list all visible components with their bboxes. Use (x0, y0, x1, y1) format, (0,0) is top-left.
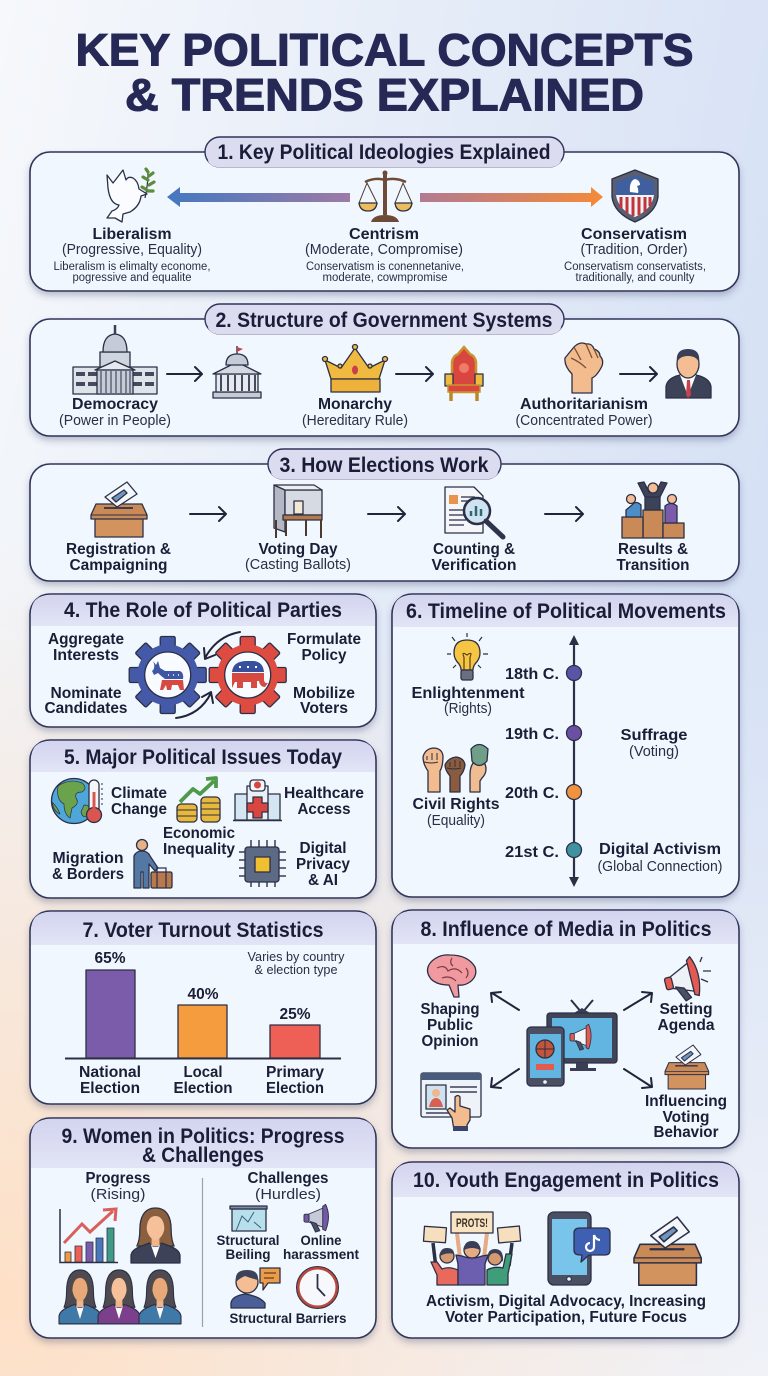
label: challenges: (Hurdles) (255, 1186, 321, 1203)
timeline century labels: 20th C. (505, 785, 559, 802)
label: enlightenment: Enlightenment (412, 685, 525, 702)
label: enlightenment: (Rights) (444, 701, 492, 717)
timeline century labels: 18th C. (505, 666, 559, 683)
label: climate: Climate (111, 785, 167, 802)
bar chart: Election (80, 1080, 140, 1097)
label: authoritarianism: Authoritarianism (520, 396, 648, 413)
arrow: cycle bottom (176, 692, 213, 718)
icon: globe and thermometer (52, 778, 103, 824)
label: structural beiling: Structural (216, 1232, 280, 1248)
label: enlightenment (412, 685, 525, 717)
heading: 6 timeline (393, 595, 738, 627)
label: shaping opinion: Shaping (420, 1001, 480, 1018)
labels: party functions left (44, 631, 128, 717)
icon: counting documents (445, 487, 503, 537)
panel: 7 voter turnout (30, 911, 376, 1104)
label: structural beiling (216, 1232, 280, 1262)
label: centrism (305, 226, 464, 284)
label: conservatism: Conservatism (581, 226, 687, 243)
icon: clock (296, 1266, 338, 1308)
label: registration (66, 541, 171, 574)
label: setting agenda (658, 1001, 715, 1034)
title: KEY POLITICAL CONCEPTS (76, 24, 694, 76)
heading: 9 women: & Challenges (142, 1143, 264, 1167)
label: democracy (59, 396, 171, 429)
icon: megaphone (660, 956, 711, 1005)
icon: man with speech bubble (231, 1268, 280, 1308)
label: digital activism: (Global Connection) (598, 859, 722, 875)
bar chart (65, 950, 341, 1097)
note: varies by country: & election type (254, 963, 338, 977)
label: challenges: Challenges (248, 1170, 329, 1187)
label: suffrage: (Voting) (629, 744, 679, 760)
bar chart: Local (184, 1064, 222, 1081)
heading: 9 women: 9. Women in Politics: Progress (62, 1124, 345, 1148)
label: suffrage (620, 727, 688, 760)
label: voting day (245, 541, 351, 573)
panel: 3 elections (30, 449, 739, 581)
labels: party functions left: Candidates (44, 700, 128, 717)
labels: party functions right (287, 631, 361, 717)
labels: party functions right: Formulate (287, 631, 361, 648)
label: results: Transition (616, 557, 690, 574)
labels: party functions right: Mobilize (293, 685, 355, 702)
label: shaping opinion: Opinion (422, 1033, 478, 1050)
label: shaping opinion (420, 1001, 480, 1050)
arrow: toward conservatism (420, 187, 603, 207)
arrow: to agenda (624, 992, 652, 1010)
icon: fist (565, 343, 603, 393)
label: civil rights: (Equality) (427, 813, 485, 829)
icon: migrant with suitcase (134, 840, 172, 888)
label: voting day: Voting Day (258, 541, 338, 558)
label: digital activism (598, 841, 722, 875)
label: suffrage: Suffrage (620, 727, 688, 744)
heading: 7 turnout: 7. Voter Turnout Statistics (82, 918, 324, 942)
panel: 2 government systems (30, 304, 739, 436)
bar chart: 65% (94, 950, 126, 967)
label: authoritarianism: (Concentrated Power) (516, 413, 652, 429)
icon: raised fists (423, 744, 488, 792)
label: counting: Verification (432, 557, 516, 574)
bar chart: 40% (188, 986, 218, 1003)
icon: red gear with elephant (209, 636, 286, 714)
bar chart: Election (174, 1080, 232, 1097)
label: influencing voting (645, 1093, 727, 1141)
icon: rising chart (60, 1209, 118, 1262)
icon: small ballot box (665, 1045, 709, 1089)
icon: three women (59, 1270, 181, 1324)
label: inequality (163, 825, 235, 858)
label: liberalism: Liberalism (92, 226, 172, 243)
label: influencing voting: Voting (662, 1109, 710, 1126)
title: & TRENDS EXPLAINED (125, 70, 644, 120)
icon: woman leader (131, 1208, 180, 1263)
heading: 8 media (393, 911, 738, 944)
label: democracy: (Power in People) (59, 413, 171, 429)
panel: 9 women in politics (30, 1118, 376, 1338)
icon: browser and hand (421, 1073, 481, 1131)
label: influencing voting: Influencing (645, 1093, 727, 1110)
label: voting day: (Casting Ballots) (245, 557, 351, 573)
label: results (616, 541, 690, 574)
icon: throne (445, 347, 483, 401)
timeline century labels: 19th C. (505, 726, 559, 743)
panel: 8 media influence (392, 910, 739, 1148)
panel: 10 youth engagement (392, 1162, 739, 1338)
label: healthcare: Healthcare (284, 785, 364, 802)
icon: dove (107, 169, 154, 222)
label: healthcare (284, 785, 364, 818)
icon: coins and rising arrow (177, 778, 220, 822)
icon: scales (359, 170, 412, 222)
label: conservatism: traditionally, and counlty (576, 272, 695, 284)
label: civil rights: Civil Rights (412, 796, 500, 813)
heading: 6 timeline: 6. Timeline of Political Movements (406, 599, 726, 623)
labels: party functions left: Aggregate (48, 631, 124, 648)
label: monarchy: (Hereditary Rule) (302, 413, 408, 429)
label: registration: Registration & (66, 541, 171, 558)
label: digital activism: Digital Activism (599, 841, 721, 858)
labels: party functions left: Interests (53, 647, 119, 664)
arrow: to browser (491, 1069, 519, 1088)
icon: glass ceiling window (230, 1206, 267, 1231)
icon: chip (239, 840, 286, 887)
label: digital privacy: Privacy (296, 856, 350, 873)
note: varies by country (248, 950, 345, 977)
label: centrism: (Moderate, Compromise) (305, 242, 463, 258)
icon: capitol (73, 325, 157, 394)
bar chart: Primary (266, 1064, 324, 1081)
label: climate (111, 785, 167, 818)
arrow: step 2 (368, 507, 405, 521)
arrow: monarchy (396, 367, 433, 381)
label: liberalism: (Progressive, Equality) (62, 242, 202, 258)
arrow: to voting (624, 1069, 652, 1088)
label: setting agenda: Agenda (658, 1017, 715, 1034)
bar chart: Election (266, 1080, 324, 1097)
label: centrism: Centrism (349, 226, 419, 243)
icon: crown (322, 344, 388, 392)
icon: voting booth (274, 485, 322, 538)
label: progress (86, 1170, 151, 1203)
timeline century labels: 21st C. (505, 844, 559, 861)
heading pill: 2 government: 2. Structure of Government Systems (216, 308, 553, 332)
arrow: cycle top (204, 632, 240, 659)
labels: party functions right: Voters (300, 700, 348, 717)
label: setting agenda: Setting (660, 1001, 712, 1018)
icon: shield (612, 170, 658, 222)
icon: purple megaphone (304, 1204, 328, 1232)
label: progress: Progress (86, 1170, 151, 1187)
heading pill: 1 ideologies: 1. Key Political Ideologies Explained (218, 140, 550, 164)
label: structural beiling: Beiling (226, 1246, 270, 1262)
label: online harassment (283, 1232, 359, 1262)
panel: 5 major issues (30, 740, 376, 898)
icon: leader (666, 349, 711, 398)
label: digital privacy (296, 840, 350, 889)
label: monarchy (302, 396, 408, 429)
label: migration (52, 850, 124, 883)
bar chart: 25% (280, 1006, 310, 1023)
timeline axis (566, 635, 582, 887)
label: youth summary: Activism, Digital Advocacy, Increasing (426, 1293, 706, 1310)
title (76, 24, 694, 120)
label: shaping opinion: Public (427, 1017, 473, 1034)
arrow: democracy (167, 367, 202, 381)
heading: 10 youth: 10. Youth Engagement in Politics (413, 1168, 719, 1192)
heading: 9 women (31, 1119, 375, 1168)
heading: 4 parties: 4. The Role of Political Parties (64, 598, 342, 622)
heading: 5 issues (31, 741, 375, 772)
timeline century labels (505, 666, 559, 861)
label: inequality: Economic (163, 825, 235, 842)
heading: 8 media: 8. Influence of Media in Politics (420, 917, 712, 941)
heading pill: 3 elections: 3. How Elections Work (280, 453, 489, 477)
labels: party functions left: Nominate (50, 685, 122, 702)
label: results: Results & (618, 541, 688, 558)
heading: 7 turnout (31, 912, 375, 945)
arrow: authoritarianism (620, 367, 657, 381)
label: conservatism: (Tradition, Order) (580, 242, 688, 258)
icon: tv and phone with megaphone (527, 1000, 617, 1086)
label: healthcare: Access (298, 801, 351, 818)
note: varies by country: Varies by country (248, 950, 345, 964)
icon: brain (428, 955, 476, 997)
label: counting (432, 541, 516, 574)
label: digital privacy: & AI (308, 872, 338, 889)
heading: 5 issues: 5. Major Political Issues Today (64, 745, 342, 769)
label: online harassment: harassment (283, 1246, 359, 1262)
label: liberalism: Liberalism is elimalty econome, (54, 261, 210, 273)
panel: 1 ideologies (30, 137, 739, 291)
label: migration: & Borders (52, 866, 124, 883)
label: influencing voting: Behavior (654, 1124, 718, 1141)
label: structural barriers: Structural Barriers (230, 1310, 347, 1326)
label: progress: (Rising) (90, 1186, 146, 1203)
label: conservatism: Conservatism conservatists, (564, 261, 706, 273)
label: centrism: Conservatism is conennetanive, (306, 261, 464, 273)
arrow: step 1 (190, 507, 226, 521)
icon: hospital (233, 780, 282, 820)
icon: protesters: PROTS! (456, 1218, 488, 1230)
icon: ballot box (91, 482, 147, 537)
label: digital privacy: Digital (300, 840, 346, 857)
label: migration: Migration (52, 850, 124, 867)
icon: results podium (622, 482, 684, 538)
arrow: step 3 (545, 507, 583, 521)
panel: 6 timeline (392, 594, 739, 897)
label: registration: Campaigning (70, 557, 168, 574)
icon: protesters (423, 1212, 521, 1285)
label: authoritarianism (516, 396, 652, 429)
heading: 10 youth (393, 1163, 738, 1197)
label: inequality: Inequality (163, 841, 235, 858)
divider: progress and challenges (202, 1178, 204, 1327)
label: online harassment: Online (300, 1232, 342, 1248)
bar chart: National (79, 1064, 141, 1081)
label: liberalism: pogressive and equalite (72, 272, 192, 284)
label: youth summary: Voter Participation, Future Focus (445, 1309, 687, 1326)
label: monarchy: Monarchy (318, 396, 392, 413)
label: counting: Counting & (433, 541, 515, 558)
arrow: toward liberalism (167, 187, 350, 207)
icon: phone with social bubble (548, 1212, 610, 1285)
icon: light bulb (447, 633, 488, 680)
label: democracy: Democracy (72, 396, 158, 413)
icon: blue gear with donkey (129, 636, 206, 714)
label: conservatism (564, 226, 706, 284)
heading: 4 parties (31, 595, 375, 626)
labels: party functions right: Policy (302, 647, 347, 664)
label: centrism: moderate, cowmpromise (322, 272, 448, 284)
icon: small capitol (213, 346, 261, 398)
icon: large ballot box (634, 1217, 701, 1285)
label: youth summary (426, 1293, 706, 1326)
label: civil rights (412, 796, 500, 829)
label: climate: Change (111, 801, 167, 818)
label: challenges (248, 1170, 329, 1203)
panel: 4 political parties (30, 594, 376, 727)
arrow: to opinion (491, 992, 519, 1010)
label: liberalism (54, 226, 210, 284)
